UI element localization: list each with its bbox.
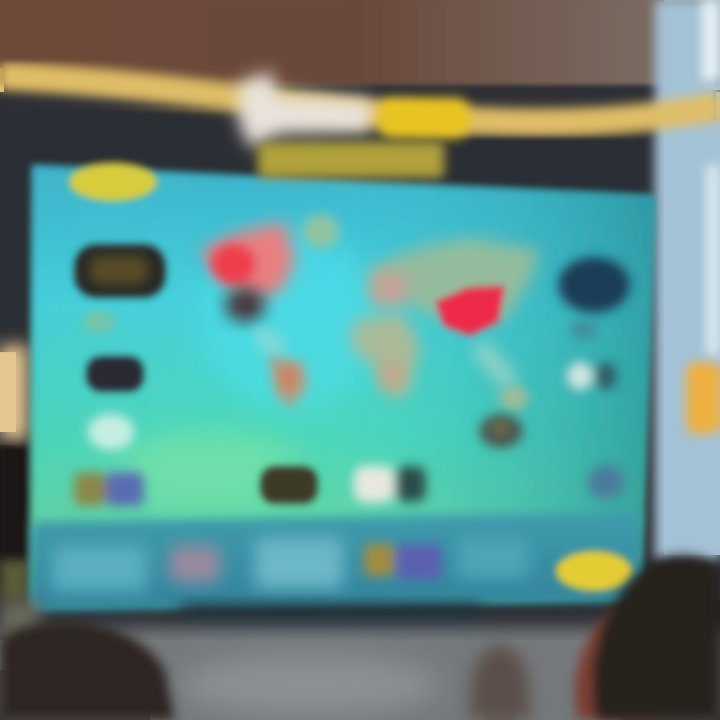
title yellow block [378, 98, 470, 138]
eurasia [366, 238, 540, 320]
south america [268, 356, 308, 408]
dark pill 1 [74, 244, 166, 298]
strip card 3 [255, 538, 343, 588]
small label [571, 321, 597, 339]
world map [200, 214, 540, 448]
white spot [88, 414, 134, 450]
blue spot [588, 465, 624, 499]
title white block [238, 72, 370, 148]
reddish rim of right head [574, 605, 660, 720]
olive pill centre [90, 256, 148, 284]
right column items [558, 257, 630, 499]
audience floor [0, 628, 720, 720]
dark pill 2 [86, 356, 144, 392]
indonesia [500, 386, 528, 410]
strip card 1 [52, 545, 147, 591]
strip card 4 colour blocks [364, 544, 442, 580]
audience [0, 555, 720, 720]
north america bright spot [211, 244, 255, 284]
head right [594, 555, 720, 720]
title sign [238, 72, 470, 178]
orange sign at right edge [686, 362, 720, 434]
white and dark blocks [354, 466, 426, 502]
bottom row items [260, 466, 426, 504]
link to south america [258, 330, 282, 354]
strip card 2 [170, 546, 220, 582]
head left [0, 621, 175, 720]
greenland [303, 214, 339, 248]
strip card 5 [458, 538, 528, 578]
yellow button bottom right [556, 551, 632, 591]
dark olive pill [260, 466, 318, 504]
screen glow: lower left [120, 430, 300, 510]
africa tan patch [380, 362, 404, 390]
yellow badge top left [69, 163, 157, 201]
europe rose patch [372, 270, 408, 306]
screen glow: centre [200, 230, 380, 410]
southeast asia link [478, 345, 512, 385]
dark central america region [225, 288, 265, 322]
colour blocks [74, 472, 144, 506]
ceiling light band [0, 76, 720, 122]
mid heads row [180, 655, 440, 715]
asia red region [436, 286, 504, 336]
small label [82, 312, 114, 332]
left edge shoulder [0, 600, 40, 640]
north america pale region [200, 222, 295, 298]
south america highlight [279, 365, 297, 391]
white and dark spot [567, 362, 617, 390]
main screen [30, 165, 655, 610]
subtitle yellow-olive bar [258, 142, 444, 178]
bottom info strip [32, 512, 640, 610]
australia dark [479, 414, 523, 448]
australia olive highlight [492, 422, 508, 434]
africa [352, 312, 420, 396]
small head right of centre [470, 645, 530, 720]
navy pill [558, 257, 630, 313]
left column items [74, 244, 166, 506]
screen base shadow [180, 604, 480, 632]
